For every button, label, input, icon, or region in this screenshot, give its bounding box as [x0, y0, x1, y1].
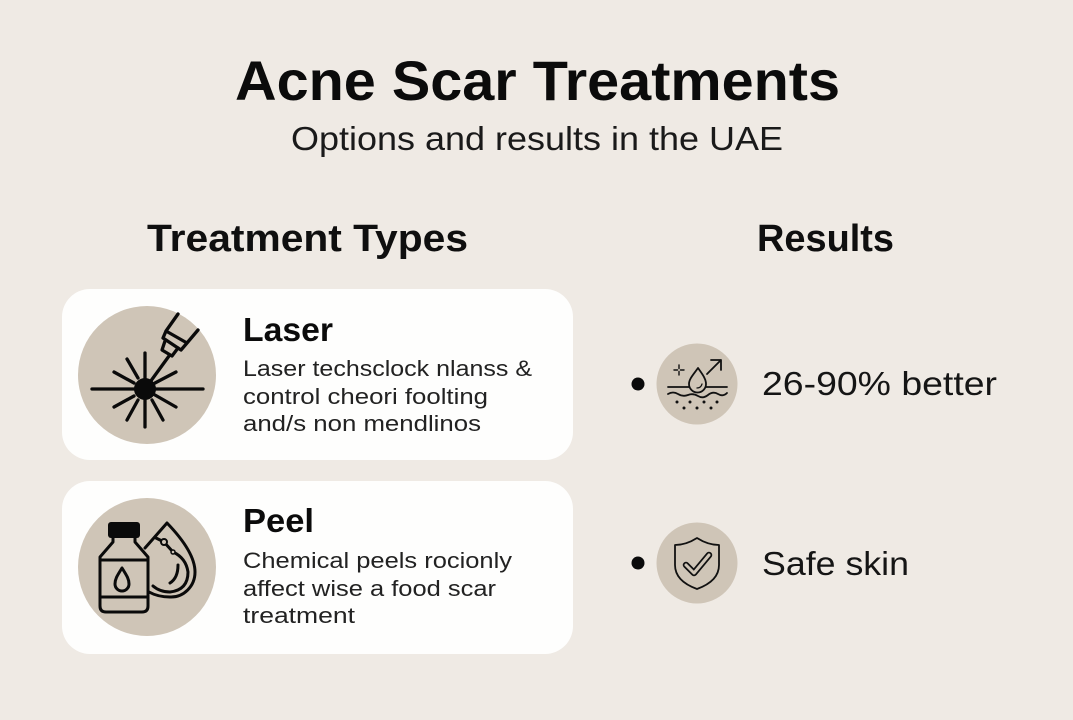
description: peel — [243, 548, 512, 628]
subtitle: Options and results in the UAE — [291, 120, 783, 157]
result: improvement — [632, 344, 997, 424]
description: laser — [243, 356, 532, 436]
icon: skin improvement — [656, 344, 738, 424]
description: peel: treatment — [243, 603, 355, 628]
heading: peel: Peel — [243, 502, 314, 539]
description: peel: Chemical peels rocionly — [243, 548, 512, 573]
description: laser: and/s non mendlinos — [243, 411, 481, 436]
description: peel: affect wise a food scar — [243, 576, 496, 601]
description: laser: control cheori foolting — [243, 384, 488, 409]
bullet — [632, 378, 644, 390]
heading: results: Results — [757, 218, 894, 260]
title: Acne Scar Treatments — [235, 49, 840, 112]
icon: laser — [78, 306, 216, 444]
result: safety — [632, 522, 909, 604]
icon: peel bottle and drop — [78, 498, 216, 636]
heading: laser: Laser — [243, 311, 333, 348]
description: laser: Laser techsclock nlanss & — [243, 356, 532, 381]
bullet — [632, 556, 644, 570]
icon: shield check — [656, 522, 738, 604]
label: improvement: 26-90% better — [762, 365, 997, 402]
panel: peel — [62, 481, 573, 654]
panel: laser — [62, 289, 573, 460]
label: safety: Safe skin — [762, 545, 909, 582]
heading: treatment types: Treatment Types — [147, 218, 468, 260]
